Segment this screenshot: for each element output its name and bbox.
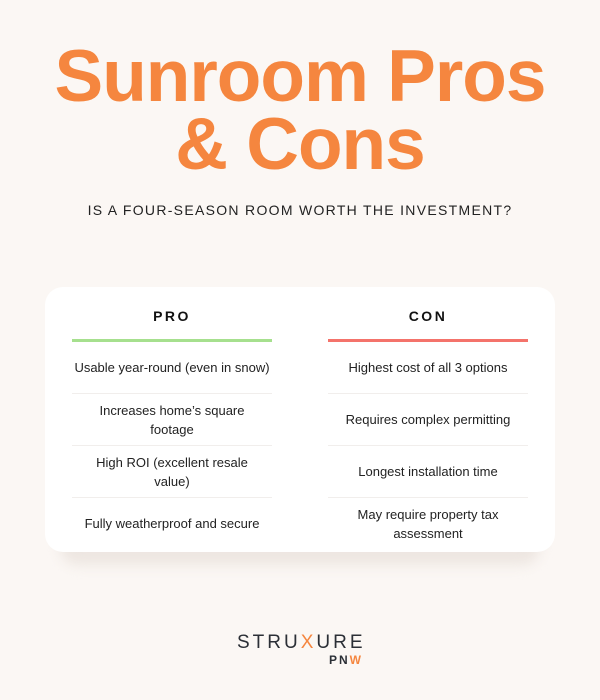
column: pro: High ROI (excellent resale [96, 454, 248, 470]
subtitle: IS A FOUR-SEASON ROOM WORTH THE INVESTMENT? [88, 202, 512, 218]
title: Sunroom Pros [55, 36, 545, 117]
column: con [328, 308, 528, 540]
column: pro: Usable year-round (even in snow) [74, 360, 270, 375]
column: pro: value) [154, 474, 190, 488]
column: con: Longest installation time [358, 464, 498, 479]
logo: PNW [329, 653, 363, 667]
panel: pros and cons card [45, 287, 555, 552]
title [55, 36, 545, 185]
column: con: assessment [393, 526, 463, 540]
logo [237, 632, 366, 667]
logo: STRUXURE [237, 632, 366, 653]
column: pro: Increases home’s square [99, 402, 244, 418]
column: pro: footage [150, 422, 194, 436]
column: pro: PRO [153, 308, 191, 324]
column: con: Requires complex permitting [346, 412, 510, 427]
title: & Cons [175, 104, 425, 185]
column: con: May require property tax [358, 506, 498, 522]
column: con: CON [409, 308, 447, 324]
column: pro [72, 308, 272, 531]
column: pro: Fully weatherproof and secure [85, 516, 259, 531]
column: con: Highest cost of all 3 options [348, 360, 507, 375]
